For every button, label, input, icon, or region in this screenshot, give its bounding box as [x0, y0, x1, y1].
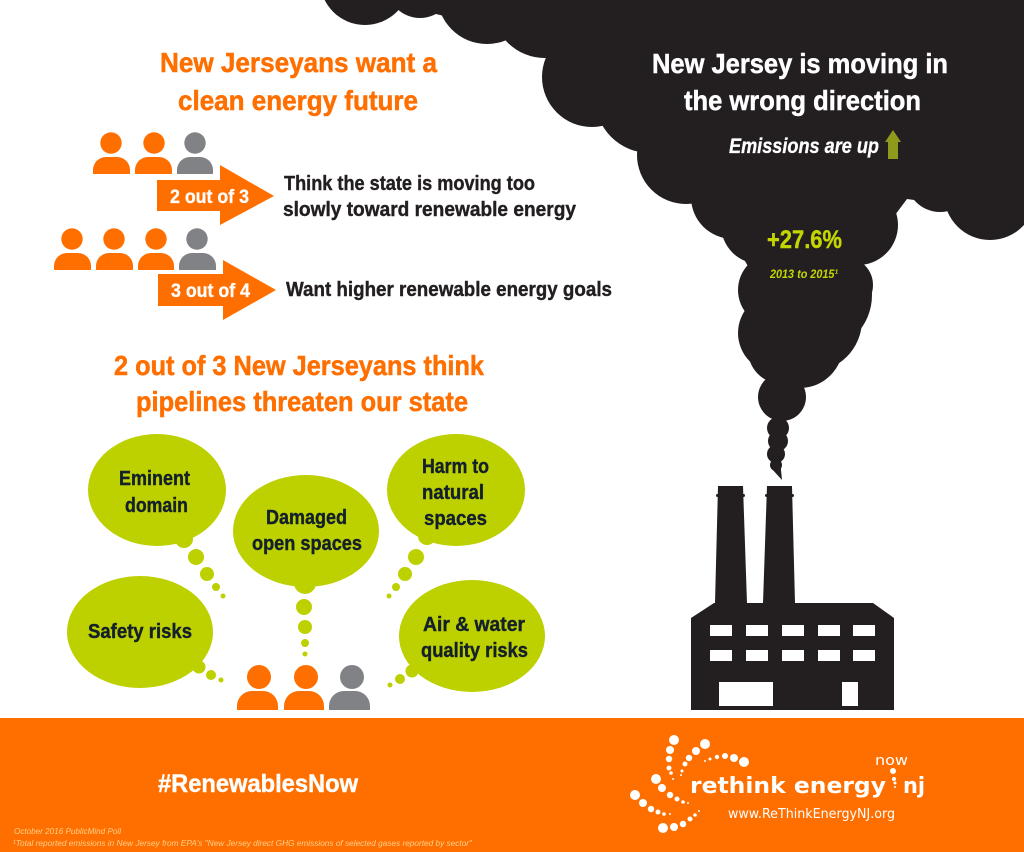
logo: rethink energy nj: [630, 735, 925, 833]
text: think the state is moving too slowly: Think the state is moving too: [284, 173, 535, 195]
footnotes: October 2016 PublicMind Poll: [14, 826, 122, 836]
people row: pipelines 2 of 3: [237, 665, 370, 710]
logo wordmark: rethink energy: [690, 774, 886, 799]
bubble: damaged open spaces: open spaces: [252, 533, 362, 555]
bubble: damaged open spaces: Damaged: [266, 507, 347, 529]
bubble: safety risks: Safety risks: [88, 621, 192, 643]
heading: New Jersey is moving in the wrong direction: the wrong direction: [684, 85, 921, 116]
heading: New Jerseyans want a clean energy future: [160, 47, 437, 116]
arrow: 3 out of 4: 3 out of 4: [171, 281, 250, 302]
bubble: damaged open spaces: [233, 475, 379, 656]
bubble: eminent domain: domain: [125, 495, 188, 517]
logo url: www.ReThinkEnergyNJ.org: [728, 807, 895, 822]
heading: New Jerseyans want a clean energy future: New Jerseyans want a: [160, 47, 437, 78]
text: want higher renewable energy goals: Want higher renewable energy goals: [286, 279, 612, 301]
text: think the state is moving too slowly: [283, 173, 577, 221]
logo now: now: [875, 753, 908, 769]
bubble: air and water quality risks: quality risks: [421, 640, 528, 662]
bubble: harm to natural spaces: spaces: [424, 508, 487, 530]
footnotes: [13, 826, 473, 848]
heading: New Jersey is moving in the wrong direction: [652, 48, 948, 116]
arrow: 2 out of 3: [157, 165, 274, 225]
hashtag: #RenewablesNow: [158, 770, 359, 798]
heading: pipelines threaten our state: pipelines threaten our state: [136, 386, 468, 417]
icon: up arrow: [885, 130, 901, 159]
emissions are up text: Emissions are up: [729, 135, 879, 158]
text: think the state is moving too slowly: slowly toward renewable energy: [283, 199, 577, 221]
icon: factory: [691, 486, 894, 710]
bubble: eminent domain: [88, 434, 226, 598]
bubble: harm to natural spaces: natural: [422, 482, 484, 504]
bubble: harm to natural spaces: Harm to: [422, 456, 489, 478]
stat: +27.6%: +27.6%: [767, 226, 842, 254]
heading: New Jersey is moving in the wrong direction: New Jersey is moving in: [652, 48, 948, 79]
stat period: 2013 to 2015: 2013 to 2015¹: [769, 267, 838, 281]
heading: New Jerseyans want a clean energy future: clean energy future: [178, 85, 418, 116]
footer band: [0, 718, 1024, 852]
heading: pipelines threaten our state: [114, 350, 484, 417]
people row: 2 out of 3: [93, 132, 213, 174]
arrow: 2 out of 3: 2 out of 3: [170, 187, 249, 208]
people row: 3 out of 4: [54, 228, 216, 270]
arrow: 3 out of 4: [158, 260, 276, 320]
bubble: harm to natural spaces: [386, 434, 525, 598]
footnotes: ¹Total reported emissions in New Jersey from EPA's "New Jersey direct GHG emissions of selected gases reported by sector": [13, 838, 473, 848]
logo dots: [630, 735, 896, 833]
bubble: safety risks: [67, 576, 224, 688]
heading: pipelines threaten our state: 2 out of 3 New Jerseyans think: [114, 350, 484, 381]
smoke cloud: [320, 0, 1024, 480]
bubble: air and water quality risks: Air & water: [423, 614, 525, 636]
bubble: eminent domain: Eminent: [119, 468, 190, 490]
bubble: air and water quality risks: [388, 580, 545, 692]
logo nj: nj: [903, 774, 925, 799]
